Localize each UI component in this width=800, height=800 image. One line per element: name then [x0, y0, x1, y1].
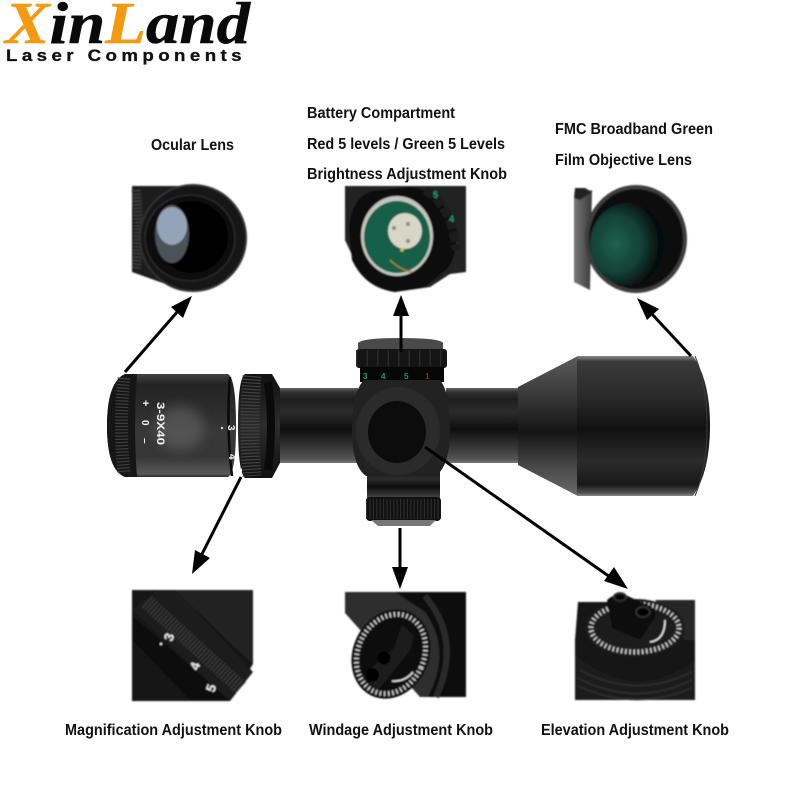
photo: magnification knob: 3	[161, 631, 177, 643]
logo tagline: Laser Components	[6, 46, 246, 65]
top turret: 5	[404, 372, 409, 381]
scale text on ocular: 5	[234, 468, 243, 473]
scale text on ocular: 3-9X40	[154, 402, 166, 445]
label: battery compartment: Battery Compartment	[307, 105, 455, 122]
ocular housing	[107, 374, 236, 477]
label: objective lens: FMC Broadband Green	[555, 121, 713, 138]
photo: magnification knob	[132, 590, 253, 701]
arrow: objective lens	[637, 298, 691, 356]
scale text on ocular: 0	[139, 420, 150, 426]
bottom turret	[366, 468, 441, 526]
main scope illustration	[107, 338, 710, 526]
scale text on ocular: –	[139, 438, 150, 444]
label: objective lens	[555, 121, 713, 169]
photo: elevation knob	[575, 593, 695, 700]
turret saddle	[352, 380, 450, 476]
arrow: battery compartment	[393, 295, 409, 352]
arrow: ocular lens	[125, 296, 192, 372]
scale text on ocular: +	[139, 400, 151, 406]
top turret: 3	[363, 372, 368, 381]
label: elevation knob: Elevation Adjustment Knob	[541, 722, 729, 739]
logo	[3, 0, 252, 65]
photo: magnification knob: 5	[203, 682, 219, 694]
photo: battery compartment: 5	[433, 190, 438, 200]
photo: battery compartment	[345, 186, 466, 292]
scale text on ocular: 3	[225, 425, 236, 431]
top turret	[356, 338, 447, 382]
arrow: windage knob	[392, 528, 408, 589]
label: magnification knob: Magnification Adjustment Knob	[65, 722, 282, 739]
top turret: 1	[425, 372, 430, 381]
photo: ocular lens	[132, 185, 246, 291]
photo: objective lens	[574, 185, 687, 293]
label: battery compartment: Brightness Adjustment Knob	[307, 166, 507, 183]
top turret: 4	[381, 372, 386, 381]
label: battery compartment: Red 5 levels / Green 5 Levels	[307, 136, 505, 153]
arrow: elevation knob	[425, 447, 628, 589]
magnification ring	[238, 374, 280, 478]
arrow: magnification knob	[192, 477, 241, 574]
side cap	[356, 387, 440, 475]
photo: battery compartment: 4	[449, 214, 454, 224]
objective bell	[518, 356, 710, 496]
photo: windage knob	[337, 592, 466, 712]
label: battery compartment	[307, 105, 507, 183]
scale text on ocular: 4	[226, 454, 237, 460]
scale text on ocular	[139, 400, 243, 473]
photo: magnification knob: 4	[187, 659, 204, 672]
label: ocular lens: Ocular Lens	[151, 137, 234, 154]
label: objective lens: Film Objective Lens	[555, 152, 692, 169]
main tube	[276, 388, 518, 463]
label: windage knob: Windage Adjustment Knob	[309, 722, 493, 739]
